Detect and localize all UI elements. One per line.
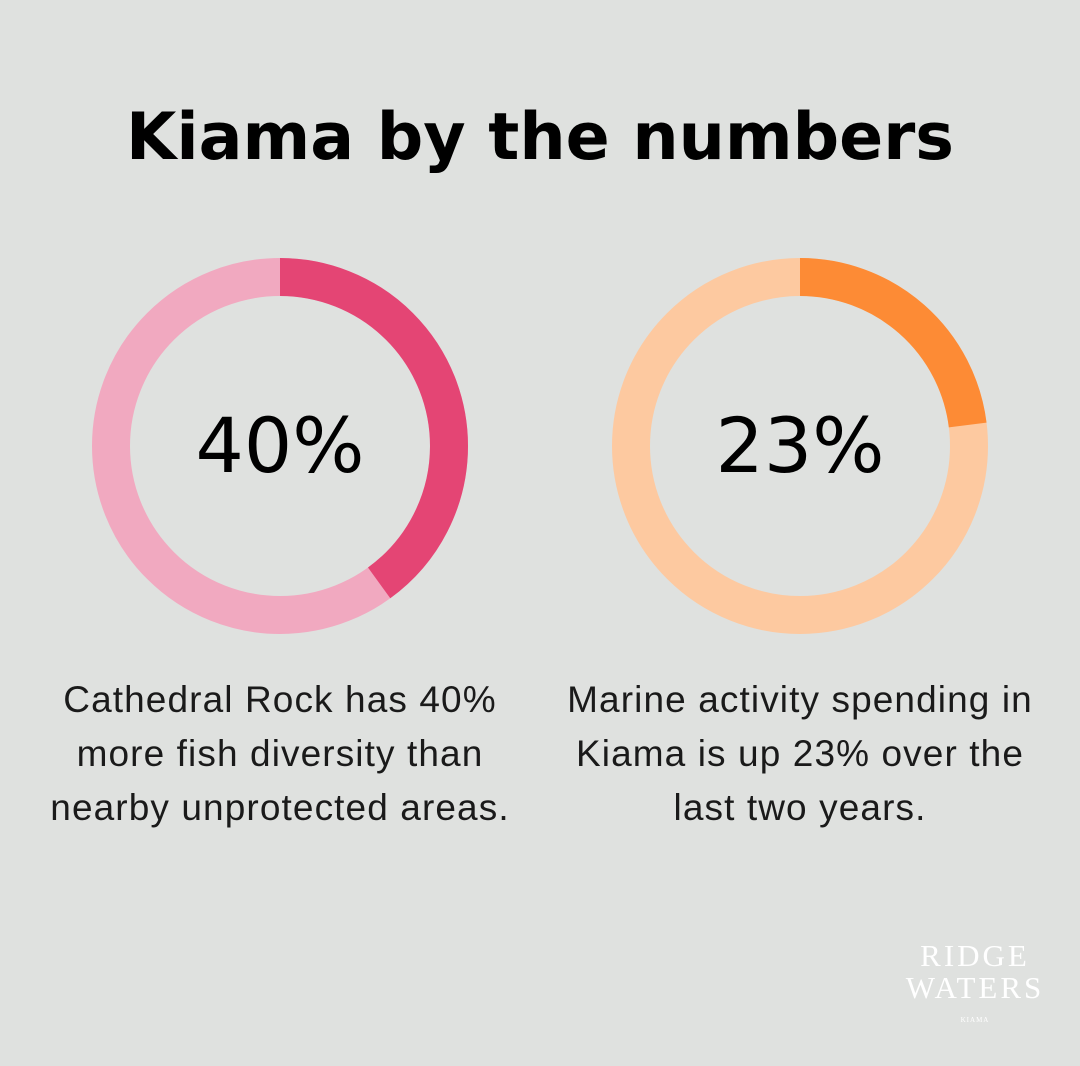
donut chart: 40%: 40% [196,401,364,490]
caption: 40%: more fish diversity than [77,733,483,774]
logo [906,938,1044,1024]
donut chart: 40% [92,258,468,634]
caption: 23% [567,679,1033,828]
donut chart: 23% [612,258,988,634]
logo: RIDGE [920,938,1030,973]
title: Kiama by the numbers [126,100,954,175]
caption: 40%: nearby unprotected areas. [50,787,510,828]
donut chart: 23%: 23% [716,401,884,490]
caption: 23%: Kiama is up 23% over the [576,733,1024,774]
caption: 40%: Cathedral Rock has 40% [63,679,497,720]
logo: KIAMA [961,1016,989,1024]
caption: 23%: last two years. [674,787,926,828]
caption: 40% [50,679,510,828]
logo: WATERS [906,970,1044,1005]
caption: 23%: Marine activity spending in [567,679,1033,720]
